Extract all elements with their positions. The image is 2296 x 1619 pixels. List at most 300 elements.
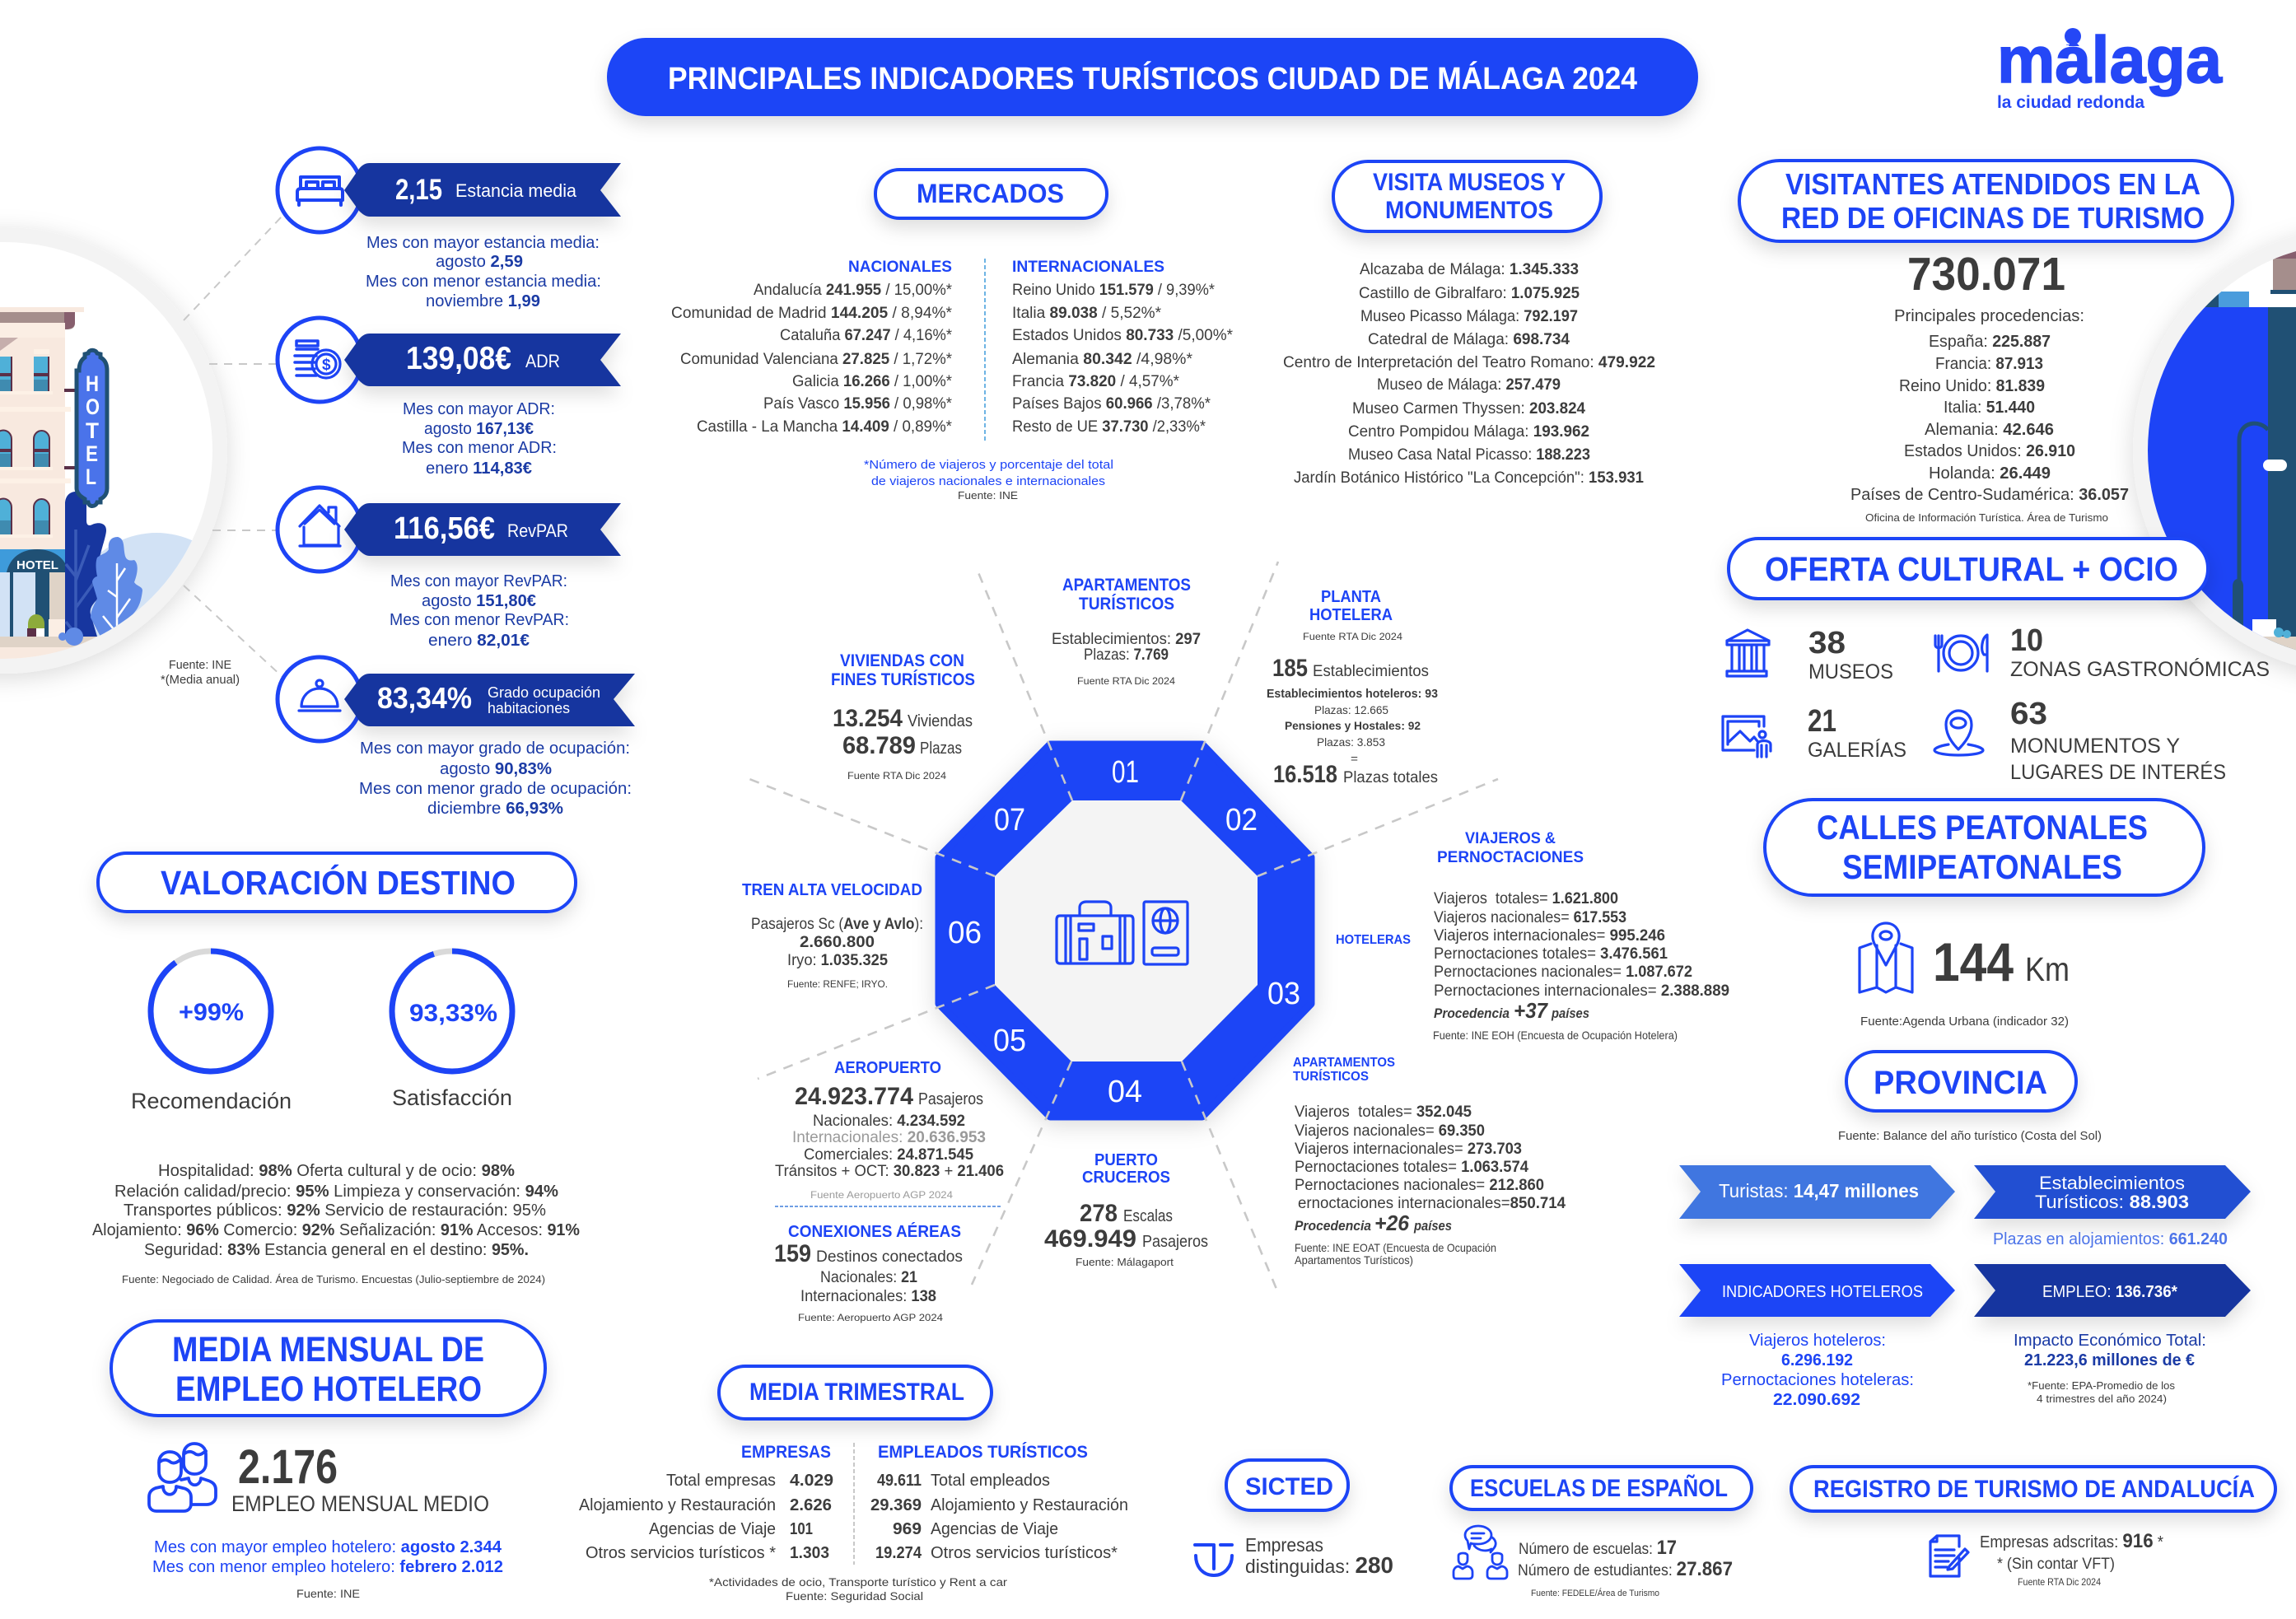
panel: sicted: distinguidas: 280 bbox=[1245, 1552, 1393, 1578]
panel: mercados internacionales: Italia 89.038 / 5,52%* bbox=[1012, 305, 1162, 322]
item: museos: 38 bbox=[1808, 626, 1846, 660]
section: conexiones aéreas: Destinos conectados bbox=[816, 1248, 963, 1266]
list: museos y monumentos: Museo de Málaga: 257.479 bbox=[1377, 376, 1561, 394]
gauge: recomendación: Recomendación bbox=[131, 1089, 292, 1113]
icon: bed bbox=[297, 177, 343, 205]
panel: registro: Fuente RTA Dic 2024 bbox=[2018, 1576, 2101, 1588]
list: museos y monumentos: Castillo de Gibralfaro: 1.075.925 bbox=[1359, 285, 1580, 302]
section 07: viviendas con fines turísticos: Plazas bbox=[920, 740, 962, 758]
panel: mercados internacionales: Estados Unidos 80.733 /5,00%* bbox=[1012, 327, 1234, 344]
text: plazas en alojamientos: Plazas en alojamientos: 661.240 bbox=[1993, 1230, 2228, 1248]
section 03: viajeros y pernoctaciones hoteleras: Viajeros internacionales= 995.246 bbox=[1434, 927, 1665, 945]
section 03b: apartamentos turísticos: Viajeros totales= 352.045 bbox=[1295, 1103, 1472, 1121]
panel: visitantes procedencias: Holanda: 26.449 bbox=[1929, 464, 2051, 483]
panel: empleo hotelero: Fuente: INE bbox=[296, 1587, 360, 1600]
section 02: planta hotelera: PLANTA bbox=[1321, 588, 1381, 606]
list: museos y monumentos: Museo Casa Natal Picasso: 188.223 bbox=[1348, 446, 1590, 464]
arrow: empleo: EMPLEO: 136.736* bbox=[2042, 1283, 2177, 1301]
text: impacto económico: 21.223,6 millones de € bbox=[2024, 1351, 2195, 1369]
gauge: recomendación bbox=[131, 951, 292, 1113]
title banner bbox=[607, 38, 1698, 116]
heading: calles peatonales bbox=[1765, 800, 2204, 895]
icon: museum bbox=[1727, 630, 1769, 676]
section 03: viajeros y pernoctaciones hoteleras: PERNOCTACIONES bbox=[1437, 849, 1584, 866]
illustration: hotel building left bbox=[0, 224, 236, 687]
source note: INE media anual: *(Media anual) bbox=[161, 673, 240, 687]
list: museos y monumentos: Centro Pompidou Málaga: 193.962 bbox=[1348, 423, 1589, 441]
section 07: viviendas con fines turísticos bbox=[831, 651, 975, 782]
indicator: estancia media: 2,15 bbox=[395, 174, 442, 206]
section 04: puerto cruceros: PUERTO bbox=[1094, 1151, 1158, 1169]
panel: empresas: EMPRESAS bbox=[741, 1443, 831, 1462]
panel: visitantes procedencias: Estados Unidos: 26.910 bbox=[1904, 442, 2075, 460]
section 04: puerto cruceros: CRUCEROS bbox=[1082, 1169, 1170, 1187]
panel: empleo hotelero: 2.176 bbox=[238, 1440, 338, 1494]
section 03: viajeros y pernoctaciones hoteleras: países bbox=[1551, 1005, 1589, 1021]
indicator: grado de ocupación: Mes con mayor grado de ocupación: bbox=[360, 740, 630, 758]
icon: SICTED mark bbox=[1195, 1545, 1232, 1575]
panel: mercados internacionales: Francia 73.820 / 4,57%* bbox=[1012, 373, 1180, 390]
section 02: planta hotelera: Establecimientos hoteleros: 93 bbox=[1267, 687, 1438, 701]
indicator: grado de ocupación: habitaciones bbox=[488, 700, 570, 716]
section 06: tren alta velocidad: TREN ALTA VELOCIDAD bbox=[742, 881, 922, 899]
section 02: planta hotelera: HOTELERA bbox=[1309, 606, 1393, 624]
segment numbers: 02 bbox=[1225, 803, 1258, 837]
indicator: RevPAR: 116,56€ bbox=[394, 511, 495, 546]
arrow: turistas: Turistas: 14,47 millones bbox=[1719, 1180, 1919, 1201]
item: zonas gastronómicas: 10 bbox=[2010, 623, 2043, 658]
panel: registro: * (Sin contar VFT) bbox=[1997, 1556, 2115, 1573]
section 02: planta hotelera: 185 bbox=[1272, 655, 1308, 682]
section 03b: apartamentos turísticos: TURÍSTICOS bbox=[1293, 1068, 1369, 1084]
arrow: indicadores hoteleros: INDICADORES HOTELEROS bbox=[1722, 1283, 1923, 1301]
source note: provincia: Fuente: Balance del año turístico (Costa del Sol) bbox=[1838, 1129, 2102, 1143]
section 03b: apartamentos turísticos: ernoctaciones internacionales=850.714 bbox=[1298, 1195, 1566, 1212]
section 01: apartamentos turísticos: Plazas: 7.769 bbox=[1084, 646, 1169, 664]
item: zonas gastronómicas: ZONAS GASTRONÓMICAS bbox=[2010, 657, 2270, 681]
item: galerías: 21 bbox=[1808, 704, 1836, 739]
section 07: viviendas con fines turísticos: 13.254 bbox=[833, 705, 903, 732]
dashed rays from octagon bbox=[745, 562, 1498, 1293]
section 01: apartamentos turísticos: TURÍSTICOS bbox=[1079, 595, 1174, 614]
panel: escuelas: Fuente: FEDELE/Área de Turismo bbox=[1531, 1588, 1659, 1598]
panel: calles 144 km: Km bbox=[2025, 950, 2070, 988]
icon: service bell bbox=[299, 680, 340, 711]
section 02: planta hotelera: 16.518 bbox=[1273, 761, 1337, 788]
indicator: RevPAR: agosto 151,80€ bbox=[422, 592, 536, 610]
panel: calles 144 km bbox=[1860, 923, 2070, 1029]
section 03b: apartamentos turísticos: Fuente: INE EOAT (Encuesta de Ocupación bbox=[1295, 1241, 1496, 1254]
section 02: planta hotelera: Establecimientos bbox=[1313, 663, 1429, 680]
section 02: planta hotelera: Plazas: 12.665 bbox=[1314, 703, 1388, 716]
panel: mercados nacionales: País Vasco 15.956 / 0,98%* bbox=[763, 395, 953, 413]
indicator: ADR: ADR bbox=[525, 351, 560, 371]
panel: sicted: Empresas bbox=[1245, 1534, 1323, 1556]
panel: empresas: 101 bbox=[790, 1520, 813, 1538]
indicator: grado de ocupación bbox=[278, 657, 635, 818]
divider: mercados bbox=[984, 259, 986, 441]
indicator: RevPAR: Mes con mayor RevPAR: bbox=[390, 572, 567, 590]
panel: empresas: Agencias de Viaje bbox=[649, 1520, 776, 1538]
panel: empresas: Otros servicios turísticos * bbox=[586, 1544, 776, 1562]
icon: house bbox=[300, 506, 340, 546]
arrow: empleo bbox=[1974, 1264, 2251, 1317]
icon: map with pin bbox=[1860, 923, 1912, 992]
section 03: viajeros y pernoctaciones hoteleras: VIAJEROS & bbox=[1465, 830, 1556, 847]
indicator: grado de ocupación: agosto 90,83% bbox=[440, 760, 552, 778]
panel: empleados turísticos: 969 bbox=[893, 1520, 922, 1538]
heading: media trimestral bbox=[719, 1366, 992, 1419]
section: conexiones aéreas: Internacionales: 138 bbox=[800, 1288, 936, 1305]
panel: empresas: Alojamiento y Restauración bbox=[579, 1496, 776, 1514]
logo: málaga la ciudad redonda: la ciudad redonda bbox=[1997, 93, 2144, 112]
heading: sicted bbox=[1226, 1460, 1348, 1510]
item: galerías bbox=[1723, 704, 1906, 762]
list: museos y monumentos: Museo Carmen Thyssen: 203.824 bbox=[1352, 400, 1585, 418]
heading: sicted: SICTED bbox=[1245, 1473, 1333, 1500]
list: museos y monumentos bbox=[1283, 261, 1655, 487]
heading: oferta cultural + ocio: OFERTA CULTURAL + OCIO bbox=[1765, 550, 2178, 588]
panel: mercados internacionales: Países Bajos 60.966 /3,78%* bbox=[1012, 395, 1211, 413]
section 04: puerto cruceros: Pasajeros bbox=[1142, 1233, 1208, 1251]
section 05: aeropuerto: Comerciales: 24.871.545 bbox=[804, 1146, 973, 1164]
arrow: establecimientos turísticos: Turísticos: 88.903 bbox=[2035, 1192, 2189, 1212]
panel: empleados turísticos: 49.611 bbox=[877, 1472, 922, 1490]
panel: visitantes procedencias: Países de Centro-Sudamérica: 36.057 bbox=[1850, 486, 2129, 504]
panel: escuelas bbox=[1454, 1526, 1733, 1598]
indicator: estancia media bbox=[278, 148, 621, 310]
icon: plate and cutlery bbox=[1935, 635, 1987, 671]
list: museos y monumentos: Alcazaba de Málaga: 1.345.333 bbox=[1360, 261, 1579, 278]
section 05: aeropuerto: Fuente Aeropuerto AGP 2024 bbox=[810, 1189, 953, 1201]
panel: empleados turísticos: Alojamiento y Restauración bbox=[931, 1496, 1128, 1514]
section 03: viajeros y pernoctaciones hoteleras: Pernoctaciones nacionales= 1.087.672 bbox=[1434, 963, 1692, 981]
section 01: apartamentos turísticos: APARTAMENTOS bbox=[1062, 576, 1191, 595]
segment numbers: 01 bbox=[1112, 755, 1139, 790]
indicator: RevPAR: enero 82,01€ bbox=[428, 632, 530, 650]
indicator: RevPAR bbox=[278, 488, 621, 650]
indicator: ADR bbox=[278, 318, 621, 478]
section 02: planta hotelera: Pensiones y Hostales: 92 bbox=[1285, 719, 1421, 732]
icon: coins bbox=[295, 341, 340, 378]
section 03b: apartamentos turísticos: Procedencia bbox=[1295, 1218, 1371, 1234]
icon: staff bbox=[149, 1444, 216, 1511]
arrow: establecimientos turísticos bbox=[1974, 1165, 2251, 1219]
panel: escuelas: Número de escuelas: 17 bbox=[1519, 1537, 1677, 1559]
illustration: hotel building right bbox=[2133, 227, 2296, 674]
heading: oferta cultural + ocio bbox=[1729, 539, 2208, 599]
heading: valoración destino bbox=[98, 853, 576, 912]
section: conexiones aéreas: Fuente: Aeropuerto AGP 2024 bbox=[798, 1312, 943, 1323]
heading: registro de turismo: REGISTRO DE TURISMO DE ANDALUCÍA bbox=[1813, 1475, 2255, 1503]
section 03b: apartamentos turísticos: Apartamentos Turísticos) bbox=[1295, 1253, 1413, 1267]
panel: visitantes procedencias: Reino Unido: 81.839 bbox=[1899, 377, 2045, 395]
text block: valoraciones: Hospitalidad: 98% Oferta cultural y de ocio: 98% bbox=[158, 1162, 515, 1180]
indicator: grado de ocupación: diciembre 66,93% bbox=[427, 800, 563, 818]
segment numbers: 03 bbox=[1267, 977, 1300, 1011]
indicator: ADR: Mes con mayor ADR: bbox=[403, 400, 555, 418]
text: impacto económico bbox=[2014, 1332, 2206, 1405]
footnote: mercados: Fuente: INE bbox=[958, 489, 1018, 502]
list: museos y monumentos: Museo Picasso Málaga: 792.197 bbox=[1360, 308, 1578, 325]
section 03b: apartamentos turísticos: Pernoctaciones nacionales= 212.860 bbox=[1295, 1177, 1544, 1194]
panel: empleo hotelero bbox=[149, 1440, 503, 1600]
section 02: planta hotelera: Plazas: 3.853 bbox=[1317, 735, 1385, 749]
panel: empleo hotelero: Mes con menor empleo hotelero: febrero 2.012 bbox=[152, 1558, 503, 1576]
heading: provincia bbox=[1846, 1052, 2076, 1111]
text: viajeros hoteleros: Viajeros hoteleros: bbox=[1749, 1332, 1886, 1350]
panel: mercados nacionales: Galicia 16.266 / 1,00%* bbox=[792, 373, 953, 390]
heading: valoración destino: VALORACIÓN DESTINO bbox=[161, 864, 516, 902]
section 05: aeropuerto: Internacionales: 20.636.953 bbox=[792, 1129, 986, 1146]
illustration: hotel building left: L bbox=[86, 464, 96, 489]
list: museos y monumentos: Catedral de Málaga: 698.734 bbox=[1368, 331, 1570, 348]
indicator: ADR: Mes con menor ADR: bbox=[402, 439, 557, 457]
illustration: hotel building left: HOTEL bbox=[16, 558, 58, 572]
item: monumentos: LUGARES DE INTERÉS bbox=[2010, 760, 2226, 784]
section 04: puerto cruceros: Fuente: Málagaport bbox=[1076, 1256, 1174, 1268]
heading: escuelas de español: ESCUELAS DE ESPAÑOL bbox=[1470, 1474, 1728, 1502]
illustration: hotel building left: T bbox=[86, 418, 99, 443]
section 06: tren alta velocidad: Fuente: RENFE; IRYO. bbox=[787, 978, 888, 990]
item: monumentos: 63 bbox=[2010, 697, 2047, 731]
section: conexiones aéreas: 159 bbox=[774, 1240, 811, 1267]
heading: mercados: MERCADOS bbox=[917, 179, 1064, 208]
footnote: mercados: de viajeros nacionales e internacionales bbox=[871, 474, 1105, 488]
section 03b: apartamentos turísticos: Pernoctaciones totales= 1.063.574 bbox=[1295, 1159, 1528, 1176]
indicator: estancia media: Mes con menor estancia media: bbox=[366, 273, 601, 291]
gauge: satisfacción bbox=[392, 951, 512, 1110]
section 07: viviendas con fines turísticos: Viviendas bbox=[908, 712, 973, 730]
section 05: aeropuerto: AEROPUERTO bbox=[834, 1059, 941, 1077]
heading: media mensual de empleo hotelero: MEDIA MENSUAL DE bbox=[172, 1330, 484, 1369]
text: impacto económico: 4 trimestres del año 2024) bbox=[2037, 1393, 2167, 1405]
panel: empleados turísticos: EMPLEADOS TURÍSTICOS bbox=[878, 1443, 1088, 1462]
heading: visita museos y monumentos bbox=[1333, 161, 1601, 231]
panel: empleados turísticos: Otros servicios turísticos* bbox=[931, 1544, 1118, 1562]
indicator: grado de ocupación: Grado ocupación bbox=[488, 684, 600, 701]
text block: valoraciones bbox=[92, 1162, 580, 1285]
heading: provincia: PROVINCIA bbox=[1874, 1065, 2047, 1101]
panel: visitantes procedencias: España: 225.887 bbox=[1929, 333, 2051, 351]
panel: mercados internacionales bbox=[1012, 259, 1234, 436]
section 03b: apartamentos turísticos: países bbox=[1413, 1218, 1452, 1234]
section 04: puerto cruceros bbox=[1044, 1151, 1208, 1268]
section: conexiones aéreas bbox=[774, 1222, 963, 1323]
heading: visita museos y monumentos: VISITA MUSEOS Y bbox=[1373, 169, 1566, 196]
section: conexiones aéreas: Nacionales: 21 bbox=[820, 1269, 917, 1286]
footnote: media trimestral: Fuente: Seguridad Social bbox=[786, 1589, 923, 1603]
title banner: PRINCIPALES INDICADORES TURÍSTICOS CIUDAD DE MÁLAGA 2024 bbox=[668, 60, 1637, 96]
section 05: aeropuerto: Nacionales: 4.234.592 bbox=[813, 1113, 965, 1130]
item: monumentos bbox=[1934, 697, 2226, 784]
panel: mercados nacionales: Comunidad de Madrid 144.205 / 8,94%* bbox=[671, 305, 953, 322]
panel: mercados nacionales: Castilla - La Mancha 14.409 / 0,89%* bbox=[697, 418, 953, 436]
segment numbers: 04 bbox=[1108, 1075, 1142, 1109]
text: viajeros hoteleros: 22.090.692 bbox=[1773, 1391, 1860, 1409]
panel: empleados turísticos: Total empleados bbox=[931, 1472, 1050, 1490]
panel: empleados turísticos: Agencias de Viaje bbox=[931, 1520, 1058, 1538]
panel: empleados turísticos: 29.369 bbox=[870, 1496, 922, 1514]
indicator: RevPAR: Mes con menor RevPAR: bbox=[390, 611, 569, 629]
divider: media trimestral bbox=[853, 1443, 855, 1565]
panel: visitantes procedencias: Francia: 87.913 bbox=[1935, 355, 2043, 373]
segment numbers: 07 bbox=[994, 803, 1025, 837]
section 07: viviendas con fines turísticos: Fuente RTA Dic 2024 bbox=[847, 770, 946, 782]
icon: document bbox=[1930, 1536, 1968, 1576]
indicator: grado de ocupación: Mes con menor grado de ocupación: bbox=[359, 780, 632, 798]
illustration: hotel building left: E bbox=[86, 441, 98, 466]
heading: visitantes atendidos bbox=[1739, 161, 2233, 241]
section 03: viajeros y pernoctaciones hoteleras: Fuente: INE EOH (Encuesta de Ocupación Hotelera) bbox=[1433, 1029, 1678, 1042]
item: zonas gastronómicas bbox=[1935, 623, 2270, 681]
indicator: ADR: enero 114,83€ bbox=[426, 460, 532, 478]
section 03: viajeros y pernoctaciones hoteleras: +37 bbox=[1514, 998, 1548, 1023]
indicator: ADR: agosto 167,13€ bbox=[424, 420, 534, 438]
heading: media mensual de empleo hotelero: EMPLEO HOTELERO bbox=[175, 1369, 482, 1409]
panel: empresas: Total empresas bbox=[666, 1472, 776, 1490]
icon: suitcase bbox=[1057, 902, 1133, 963]
section 04: puerto cruceros: Escalas bbox=[1123, 1207, 1173, 1225]
section 06: tren alta velocidad bbox=[742, 881, 923, 990]
panel: visitantes procedencias bbox=[1850, 248, 2129, 524]
panel: empleados turísticos: 19.274 bbox=[875, 1544, 922, 1562]
heading: registro de turismo bbox=[1791, 1467, 2275, 1511]
text: viajeros hoteleros: 6.296.192 bbox=[1781, 1351, 1853, 1369]
indicator: RevPAR: RevPAR bbox=[507, 520, 568, 541]
section 04: puerto cruceros: 469.949 bbox=[1044, 1225, 1136, 1253]
indicator: ADR: 139,08€ bbox=[406, 341, 511, 376]
panel: empleo hotelero: Mes con mayor empleo hotelero: agosto 2.344 bbox=[154, 1538, 502, 1556]
section 07: viviendas con fines turísticos: VIVIENDAS CON bbox=[840, 651, 964, 670]
illustration: hotel building left: H bbox=[86, 371, 99, 396]
segment numbers: 05 bbox=[993, 1024, 1026, 1058]
text block: valoraciones: Fuente: Negociado de Calidad. Área de Turismo. Encuestas (Julio-septiembre de 2024) bbox=[122, 1273, 545, 1285]
source note: INE media anual: Fuente: INE bbox=[169, 658, 231, 672]
text: viajeros hoteleros bbox=[1721, 1332, 1914, 1409]
arrow: establecimientos turísticos: Establecimientos bbox=[2039, 1173, 2185, 1193]
section 03: viajeros y pernoctaciones hoteleras: HOTELERAS bbox=[1336, 933, 1411, 947]
text block: valoraciones: Relación calidad/precio: 95% Limpieza y conservación: 94% bbox=[114, 1183, 558, 1201]
panel: escuelas: Número de estudiantes: 27.867 bbox=[1518, 1558, 1733, 1580]
gauge: satisfacción: Satisfacción bbox=[392, 1085, 512, 1110]
panel: mercados nacionales: NACIONALES bbox=[848, 259, 952, 276]
panel: visitantes procedencias: 730.071 bbox=[1907, 248, 2065, 301]
panel: visitantes procedencias: Italia: 51.440 bbox=[1944, 399, 2035, 417]
heading: visita museos y monumentos: MONUMENTOS bbox=[1385, 197, 1553, 224]
item: museos: MUSEOS bbox=[1808, 660, 1893, 684]
section 03: viajeros y pernoctaciones hoteleras: Viajeros totales= 1.621.800 bbox=[1434, 890, 1618, 907]
footnote: mercados bbox=[864, 458, 1113, 502]
dashed connectors from hotel to indicators bbox=[184, 216, 282, 677]
text block: valoraciones: Alojamiento: 96% Comercio: 92% Señalización: 91% Accesos: 91% bbox=[92, 1221, 580, 1239]
section 07: viviendas con fines turísticos: 68.789 bbox=[842, 732, 916, 759]
panel: visitantes procedencias: Alemania: 42.646 bbox=[1925, 421, 2054, 439]
chart: octagon hub bbox=[939, 744, 1311, 1117]
footnote: mercados: *Número de viajeros y porcentaje del total bbox=[864, 458, 1113, 472]
heading: mercados bbox=[875, 170, 1107, 218]
panel: mercados internacionales: Alemania 80.342 /4,98%* bbox=[1012, 351, 1193, 368]
panel: empresas: 2.626 bbox=[790, 1496, 832, 1514]
panel: visitantes procedencias: Principales procedencias: bbox=[1894, 307, 2084, 325]
panel: registro bbox=[1930, 1530, 2163, 1588]
heading: calles peatonales: SEMIPEATONALES bbox=[1842, 847, 2122, 886]
section 04: puerto cruceros: 278 bbox=[1080, 1200, 1118, 1227]
section 03b: apartamentos turísticos bbox=[1293, 1056, 1566, 1267]
panel: registro: Empresas adscritas: 916 * bbox=[1980, 1530, 2163, 1552]
section 03b: apartamentos turísticos: APARTAMENTOS bbox=[1293, 1056, 1395, 1070]
item: galerías: GALERÍAS bbox=[1808, 738, 1906, 762]
segment numbers bbox=[948, 755, 1300, 1109]
panel: mercados nacionales: Cataluña 67.247 / 4,16%* bbox=[780, 327, 953, 344]
section 03b: apartamentos turísticos: Viajeros nacionales= 69.350 bbox=[1295, 1122, 1485, 1140]
panel: empresas: 1.303 bbox=[790, 1544, 829, 1562]
section 05: aeropuerto: 24.923.774 bbox=[795, 1083, 913, 1110]
panel: mercados internacionales: INTERNACIONALES bbox=[1012, 259, 1164, 276]
section 06: tren alta velocidad: 2.660.800 bbox=[800, 934, 875, 951]
section 01: apartamentos turísticos bbox=[1052, 576, 1201, 687]
icon: coins: $ bbox=[322, 357, 331, 374]
illustration: hotel building left: O bbox=[86, 394, 100, 419]
logo: málaga la ciudad redonda: málaga bbox=[1997, 23, 2223, 96]
panel: mercados internacionales: Reino Unido 151.579 / 9,39%* bbox=[1012, 282, 1216, 299]
section 02: planta hotelera: = bbox=[1351, 752, 1358, 765]
section 05: aeropuerto: Pasajeros bbox=[918, 1090, 983, 1108]
gauge: satisfacción: 93,33% bbox=[409, 1000, 497, 1027]
panel: sicted bbox=[1195, 1534, 1393, 1578]
section 03: viajeros y pernoctaciones hoteleras: Procedencia bbox=[1434, 1005, 1510, 1021]
panel: mercados nacionales bbox=[671, 259, 953, 436]
section 03: viajeros y pernoctaciones hoteleras bbox=[1336, 830, 1729, 1042]
footnote: media trimestral bbox=[709, 1575, 1007, 1603]
icon: passport bbox=[1144, 902, 1188, 964]
text: impacto económico: *Fuente: EPA-Promedio de los bbox=[2028, 1379, 2176, 1392]
indicator: grado de ocupación: 83,34% bbox=[377, 681, 472, 715]
panel: mercados nacionales: Andalucía 241.955 / 15,00%* bbox=[754, 282, 953, 299]
panel: empleo hotelero: EMPLEO MENSUAL MEDIO bbox=[231, 1491, 489, 1516]
section 02: planta hotelera: Fuente RTA Dic 2024 bbox=[1303, 631, 1402, 642]
section 07: viviendas con fines turísticos: FINES TURÍSTICOS bbox=[831, 670, 975, 689]
panel: empresas: 4.029 bbox=[790, 1472, 833, 1490]
section 03: viajeros y pernoctaciones hoteleras: Viajeros nacionales= 617.553 bbox=[1434, 909, 1626, 926]
panel: calles 144 km: Fuente:Agenda Urbana (indicador 32) bbox=[1860, 1015, 2069, 1029]
indicator: estancia media: noviembre 1,99 bbox=[426, 292, 540, 310]
section 02: planta hotelera: Plazas totales bbox=[1343, 769, 1438, 786]
item: museos bbox=[1727, 626, 1893, 684]
icon: gallery bbox=[1723, 716, 1771, 757]
section 06: tren alta velocidad: Pasajeros Sc (Ave y Avlo): bbox=[751, 916, 923, 933]
segment numbers: 06 bbox=[948, 916, 982, 950]
section 06: tren alta velocidad: Iryo: 1.035.325 bbox=[787, 952, 888, 969]
item: monumentos: MONUMENTOS Y bbox=[2010, 735, 2180, 758]
section 05: aeropuerto: Tránsitos + OCT: 30.823 + 21.406 bbox=[775, 1163, 1004, 1180]
source note: INE media anual bbox=[161, 658, 240, 687]
indicator: estancia media: Mes con mayor estancia media: bbox=[366, 234, 600, 252]
section 03b: apartamentos turísticos: +26 bbox=[1374, 1211, 1410, 1235]
icon: location pin bbox=[1934, 711, 1983, 755]
heading: calles peatonales: CALLES PEATONALES bbox=[1817, 808, 2148, 847]
panel: calles 144 km: 144 bbox=[1933, 931, 2014, 992]
panel: empleados turísticos bbox=[870, 1443, 1128, 1562]
section 03: viajeros y pernoctaciones hoteleras: Pernoctaciones internacionales= 2.388.889 bbox=[1434, 982, 1729, 1000]
panel: mercados internacionales: Resto de UE 37.730 /2,33%* bbox=[1012, 418, 1206, 436]
heading: visitantes atendidos: VISITANTES ATENDIDOS EN LA bbox=[1785, 167, 2200, 201]
text: impacto económico: Impacto Económico Total: bbox=[2014, 1332, 2206, 1350]
heading: visitantes atendidos: RED DE OFICINAS DE TURISMO bbox=[1781, 201, 2205, 235]
gauge: recomendación: +99% bbox=[179, 999, 244, 1026]
text block: valoraciones: Seguridad: 83% Estancia general en el destino: 95%. bbox=[144, 1241, 529, 1259]
text block: valoraciones: Transportes públicos: 92% Servicio de restauración: 95% bbox=[124, 1201, 546, 1220]
